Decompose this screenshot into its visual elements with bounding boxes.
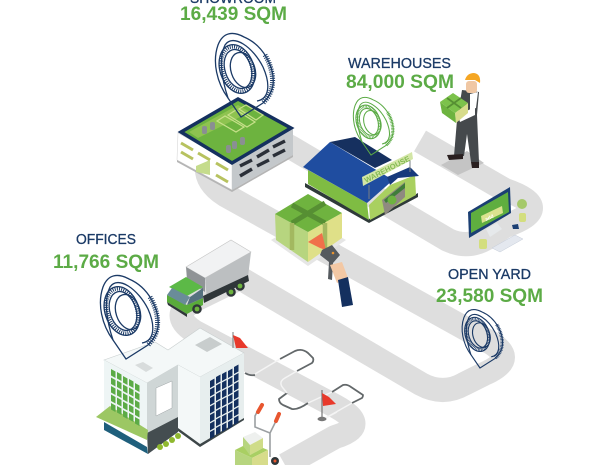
red flag 2 <box>318 390 336 421</box>
showroom building <box>177 99 293 192</box>
heading: offices <box>53 231 159 273</box>
heading: open yard <box>436 266 543 307</box>
heading: warehouses <box>346 55 454 93</box>
warehouse building <box>303 137 419 223</box>
heading: showroom: 16,439 SQM <box>180 4 287 25</box>
office building <box>96 328 244 454</box>
heading: offices: OFFICES <box>76 231 136 248</box>
map pin: warehouses <box>352 97 393 155</box>
heading: warehouses: 84,000 SQM <box>346 72 454 93</box>
road winding line <box>245 350 363 420</box>
hand holding scanner <box>308 233 353 307</box>
heading: offices: 11,766 SQM <box>53 252 159 273</box>
road network <box>182 120 531 465</box>
red flag 1 <box>232 332 248 348</box>
heading: open yard: 23,580 SQM <box>436 286 543 307</box>
map pin: showroom <box>213 33 273 117</box>
map pin: open yard <box>460 310 503 368</box>
warehouse building: WAREHOUSE <box>363 154 411 185</box>
heading: open yard: OPEN YARD <box>448 266 531 283</box>
map pin: offices <box>98 275 158 359</box>
computer monitor <box>468 187 527 252</box>
green window grid <box>111 369 140 426</box>
box with scanner target <box>271 194 346 266</box>
navy window grid <box>210 364 238 439</box>
heading: warehouses: WAREHOUSES <box>348 55 451 72</box>
hand trolley with boxes <box>235 405 279 465</box>
worker carrying box <box>440 73 484 175</box>
delivery truck <box>167 240 251 317</box>
computer monitor: add <box>484 214 495 223</box>
